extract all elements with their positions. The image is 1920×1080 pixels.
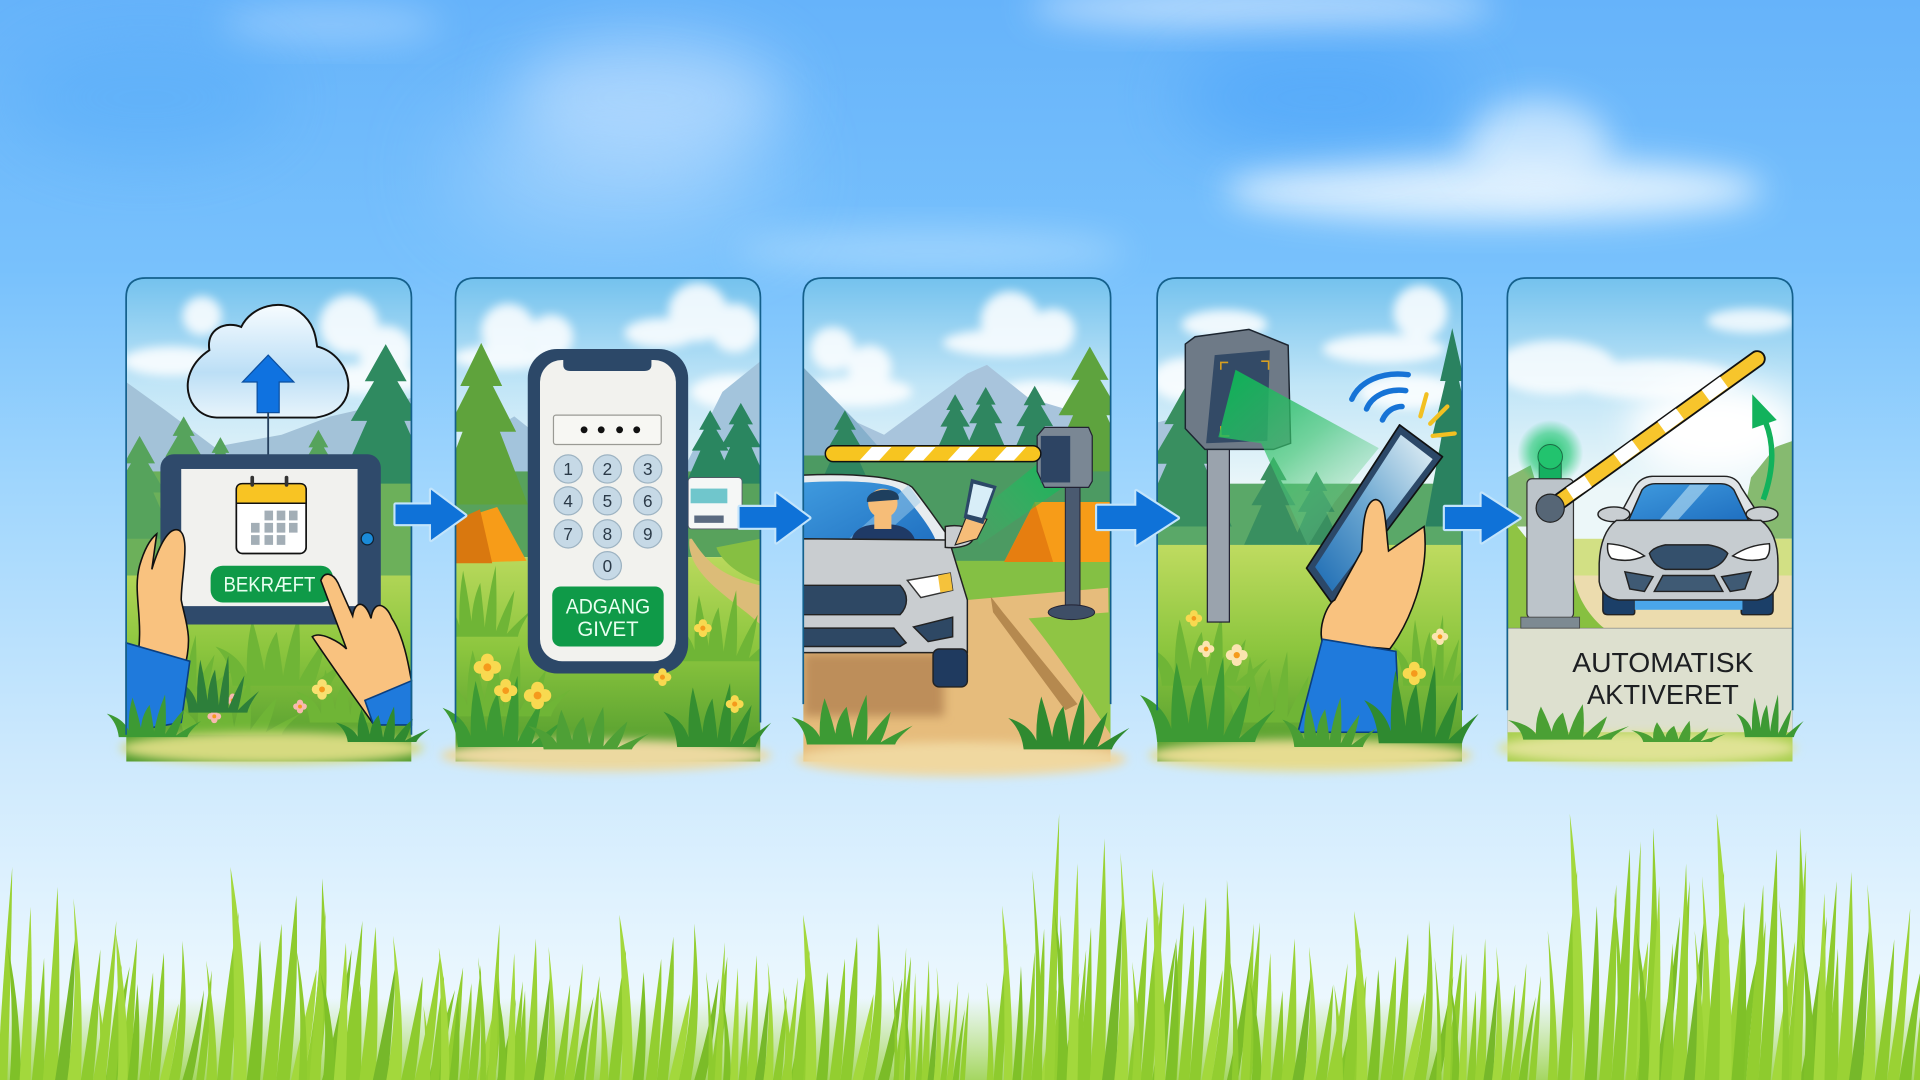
flowers panel 2 — [494, 668, 744, 713]
left hand and sleeve — [126, 530, 190, 732]
arrow 1 — [396, 490, 465, 540]
tablet — [160, 454, 381, 624]
scenery panel 4 — [1157, 279, 1462, 762]
driver — [852, 488, 915, 539]
keypad: 2 — [603, 459, 612, 479]
frame panel 2 — [456, 278, 760, 722]
arrow 4 — [1445, 493, 1520, 542]
access granted button: ADGANG — [566, 595, 650, 618]
sparkle lines — [1420, 394, 1455, 436]
panel 5: barrier opens automatically — [1494, 278, 1804, 764]
green scan beam — [1218, 370, 1379, 546]
grass tufts panel 2 — [443, 676, 771, 749]
scanner reader on post — [1185, 329, 1291, 622]
green up arrow — [1752, 394, 1777, 500]
confirm button: BEKRÆFT — [223, 573, 316, 596]
keypad: 5 — [603, 491, 612, 511]
ground under panel 2 — [441, 740, 771, 771]
camper — [688, 478, 742, 529]
green scan beam — [984, 464, 1062, 536]
arrow 2 — [740, 493, 809, 542]
car front view — [1598, 476, 1778, 615]
green status light — [1517, 420, 1583, 486]
meadow grass foreground — [0, 814, 1920, 1080]
grass tufts panel 4 — [1140, 657, 1479, 747]
barrier arm — [825, 446, 1041, 462]
keypad: 3 — [643, 459, 653, 479]
panel 3: driver shows phone at scanner — [792, 278, 1131, 776]
ground under panel 3 — [796, 742, 1127, 776]
barrier post — [1521, 479, 1580, 628]
scenery panel 2 — [456, 279, 760, 762]
confirm button — [211, 566, 333, 602]
sign — [1507, 628, 1793, 733]
panel 4: phone scanned by reader — [1139, 278, 1479, 771]
access granted button — [552, 587, 664, 647]
ground under panel 1 — [120, 732, 424, 764]
grass tufts panel 5 — [1508, 695, 1804, 742]
scenery panel 5 — [1494, 278, 1800, 762]
frame panel 1 — [126, 278, 411, 735]
wifi signal icon — [1352, 374, 1408, 420]
wooden plank — [991, 596, 1078, 710]
keypad — [554, 455, 662, 580]
keypad: 1 — [563, 459, 573, 479]
access granted button: GIVET — [577, 618, 639, 641]
panel 1: booking confirmation on tablet — [105, 278, 432, 764]
sign label — [1572, 647, 1754, 710]
scanner post — [1037, 427, 1095, 620]
sleeve panel 4 — [1298, 639, 1400, 732]
tent — [1004, 502, 1111, 562]
keypad: 6 — [643, 491, 653, 511]
arrow 3 — [1097, 491, 1178, 545]
frame panel 4 — [1157, 278, 1462, 710]
driver's phone — [955, 479, 997, 545]
keypad: 4 — [563, 491, 573, 511]
sign label: AKTIVERET — [1587, 679, 1739, 710]
grass tufts panel 1 — [107, 695, 430, 742]
scenery panel 1 — [126, 279, 412, 762]
grass tufts panel 3 — [792, 693, 1129, 749]
frame panel 3 — [803, 278, 1111, 704]
right hand and sleeve — [312, 574, 411, 725]
keypad: 0 — [603, 556, 612, 576]
scenery panel 3 — [802, 278, 1131, 762]
upload cloud icon — [188, 305, 348, 456]
calendar icon — [236, 478, 306, 553]
phone in hand — [1307, 425, 1442, 649]
phone — [528, 349, 688, 673]
passcode field — [553, 415, 661, 444]
dirt road — [803, 588, 1111, 762]
sign label: AUTOMATISK — [1572, 647, 1754, 678]
tent — [456, 507, 527, 563]
frame panel 5 — [1507, 278, 1793, 710]
keypad: 7 — [563, 524, 573, 544]
ground under panel 4 — [1149, 740, 1472, 771]
raised barrier arm — [1536, 359, 1757, 522]
keypad: 9 — [643, 524, 653, 544]
keypad: 8 — [603, 524, 612, 544]
car with driver — [803, 474, 973, 687]
panel 2: phone keypad access — [435, 278, 779, 771]
ground under panel 5 — [1498, 732, 1796, 764]
